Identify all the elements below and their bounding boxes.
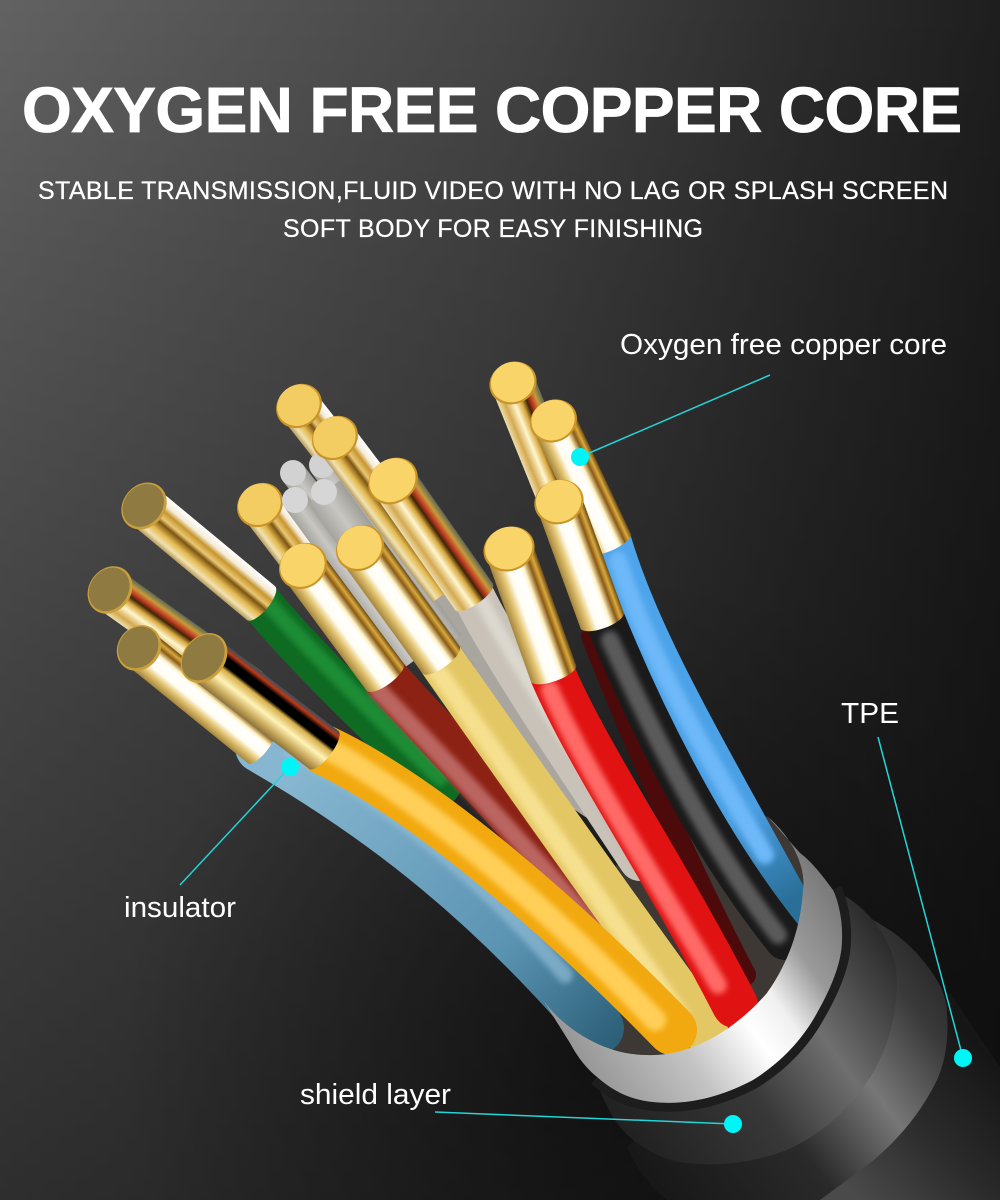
light blue wire <box>261 747 598 1028</box>
label: shield layer: shield layer <box>300 1079 451 1111</box>
subtitle text: SOFT BODY FOR EASY FINISHING <box>283 215 703 243</box>
black wire <box>592 622 785 975</box>
label: insulator: insulator <box>124 892 236 924</box>
label: TPE: TPE <box>841 698 899 730</box>
copper J <box>228 474 359 625</box>
copper L <box>78 557 265 710</box>
copper K <box>112 473 283 627</box>
inner ferrule <box>597 890 897 1164</box>
outer ferrule <box>627 920 948 1200</box>
ferrule dark seam <box>597 890 842 1103</box>
label: TPE <box>841 698 972 1067</box>
title: OXYGEN FREE COPPER CORE <box>22 74 962 146</box>
cable illustration <box>78 355 1000 1200</box>
subtitle text: STABLE TRANSMISSION,FLUID VIDEO WITH NO LAG OR SPLASH SCREEN <box>38 177 948 205</box>
silver shield ring <box>543 817 842 1103</box>
red wire <box>550 675 735 1005</box>
label: Oxygen free copper core: Oxygen free copper core <box>620 329 947 361</box>
label: shield layer <box>300 1079 742 1133</box>
copper I <box>267 375 439 575</box>
grey fibre strands <box>280 452 620 840</box>
copper C <box>528 473 628 636</box>
yellow wire <box>438 660 705 1030</box>
copper G <box>359 448 500 618</box>
TPE outer jacket <box>800 993 1000 1200</box>
dark red wire <box>378 677 695 1040</box>
grey wire <box>474 597 640 860</box>
copper F <box>270 533 410 698</box>
inner cavity <box>543 790 803 1055</box>
copper D <box>477 520 581 690</box>
copper H <box>303 407 469 604</box>
blue wire <box>611 543 790 905</box>
copper E <box>327 516 466 681</box>
copper M <box>108 616 282 770</box>
copper B <box>523 392 636 560</box>
green wire <box>261 603 440 785</box>
copper N <box>171 624 347 776</box>
label: insulator <box>124 758 299 924</box>
subtitle text <box>38 177 948 243</box>
label: Oxygen free copper core <box>571 329 947 466</box>
copper A <box>483 355 582 509</box>
orange wire <box>324 750 672 1030</box>
